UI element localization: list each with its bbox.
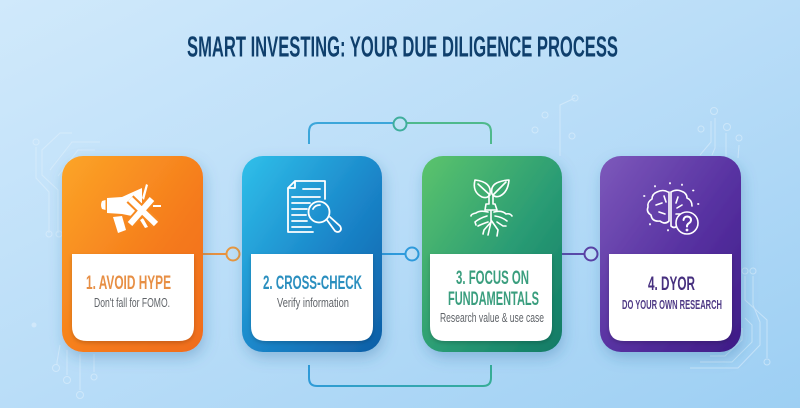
- panel: step 4 DYOR: [600, 156, 741, 352]
- text card: [251, 254, 373, 341]
- connector: step 3 to 4: [560, 248, 598, 260]
- description: Don't fall for FOMO.: [94, 296, 170, 310]
- heading: 2. CROSS-CHECK: [263, 273, 362, 294]
- description: Verify information: [277, 296, 349, 310]
- text card: [430, 254, 552, 341]
- heading: 3. FOCUS ON: [456, 268, 529, 289]
- panel: step 1 avoid hype: [62, 156, 203, 352]
- heading: FUNDAMENTALS: [448, 289, 539, 310]
- icon: document with magnifier: [288, 181, 341, 232]
- heading: [448, 268, 539, 310]
- connector: step 2 to 3: [380, 248, 418, 260]
- circuit decoration: left bottom: [32, 323, 97, 398]
- icon: sprout with roots: [471, 180, 512, 236]
- icon: crossed megaphone: [101, 184, 161, 233]
- circuit decoration: top right: [532, 95, 742, 158]
- connector: step 1 to 2: [200, 248, 240, 260]
- icon: brain with question mark: [644, 183, 698, 234]
- panel: step 3 focus on fundamentals: [422, 156, 562, 352]
- top bracket connector: [309, 118, 491, 144]
- circuit decoration: left top: [33, 133, 100, 237]
- panel: step 2 cross-check: [242, 156, 382, 352]
- text card: [72, 254, 194, 341]
- heading: 4. DYOR: [648, 274, 695, 295]
- description: DO YOUR OWN RESEARCH: [622, 298, 722, 312]
- circuit decoration: bottom right: [690, 268, 770, 368]
- bottom bracket connector: [309, 365, 491, 386]
- description: Research value & use case: [440, 311, 544, 325]
- text card: [609, 254, 732, 341]
- heading: 1. AVOID HYPE: [86, 273, 171, 294]
